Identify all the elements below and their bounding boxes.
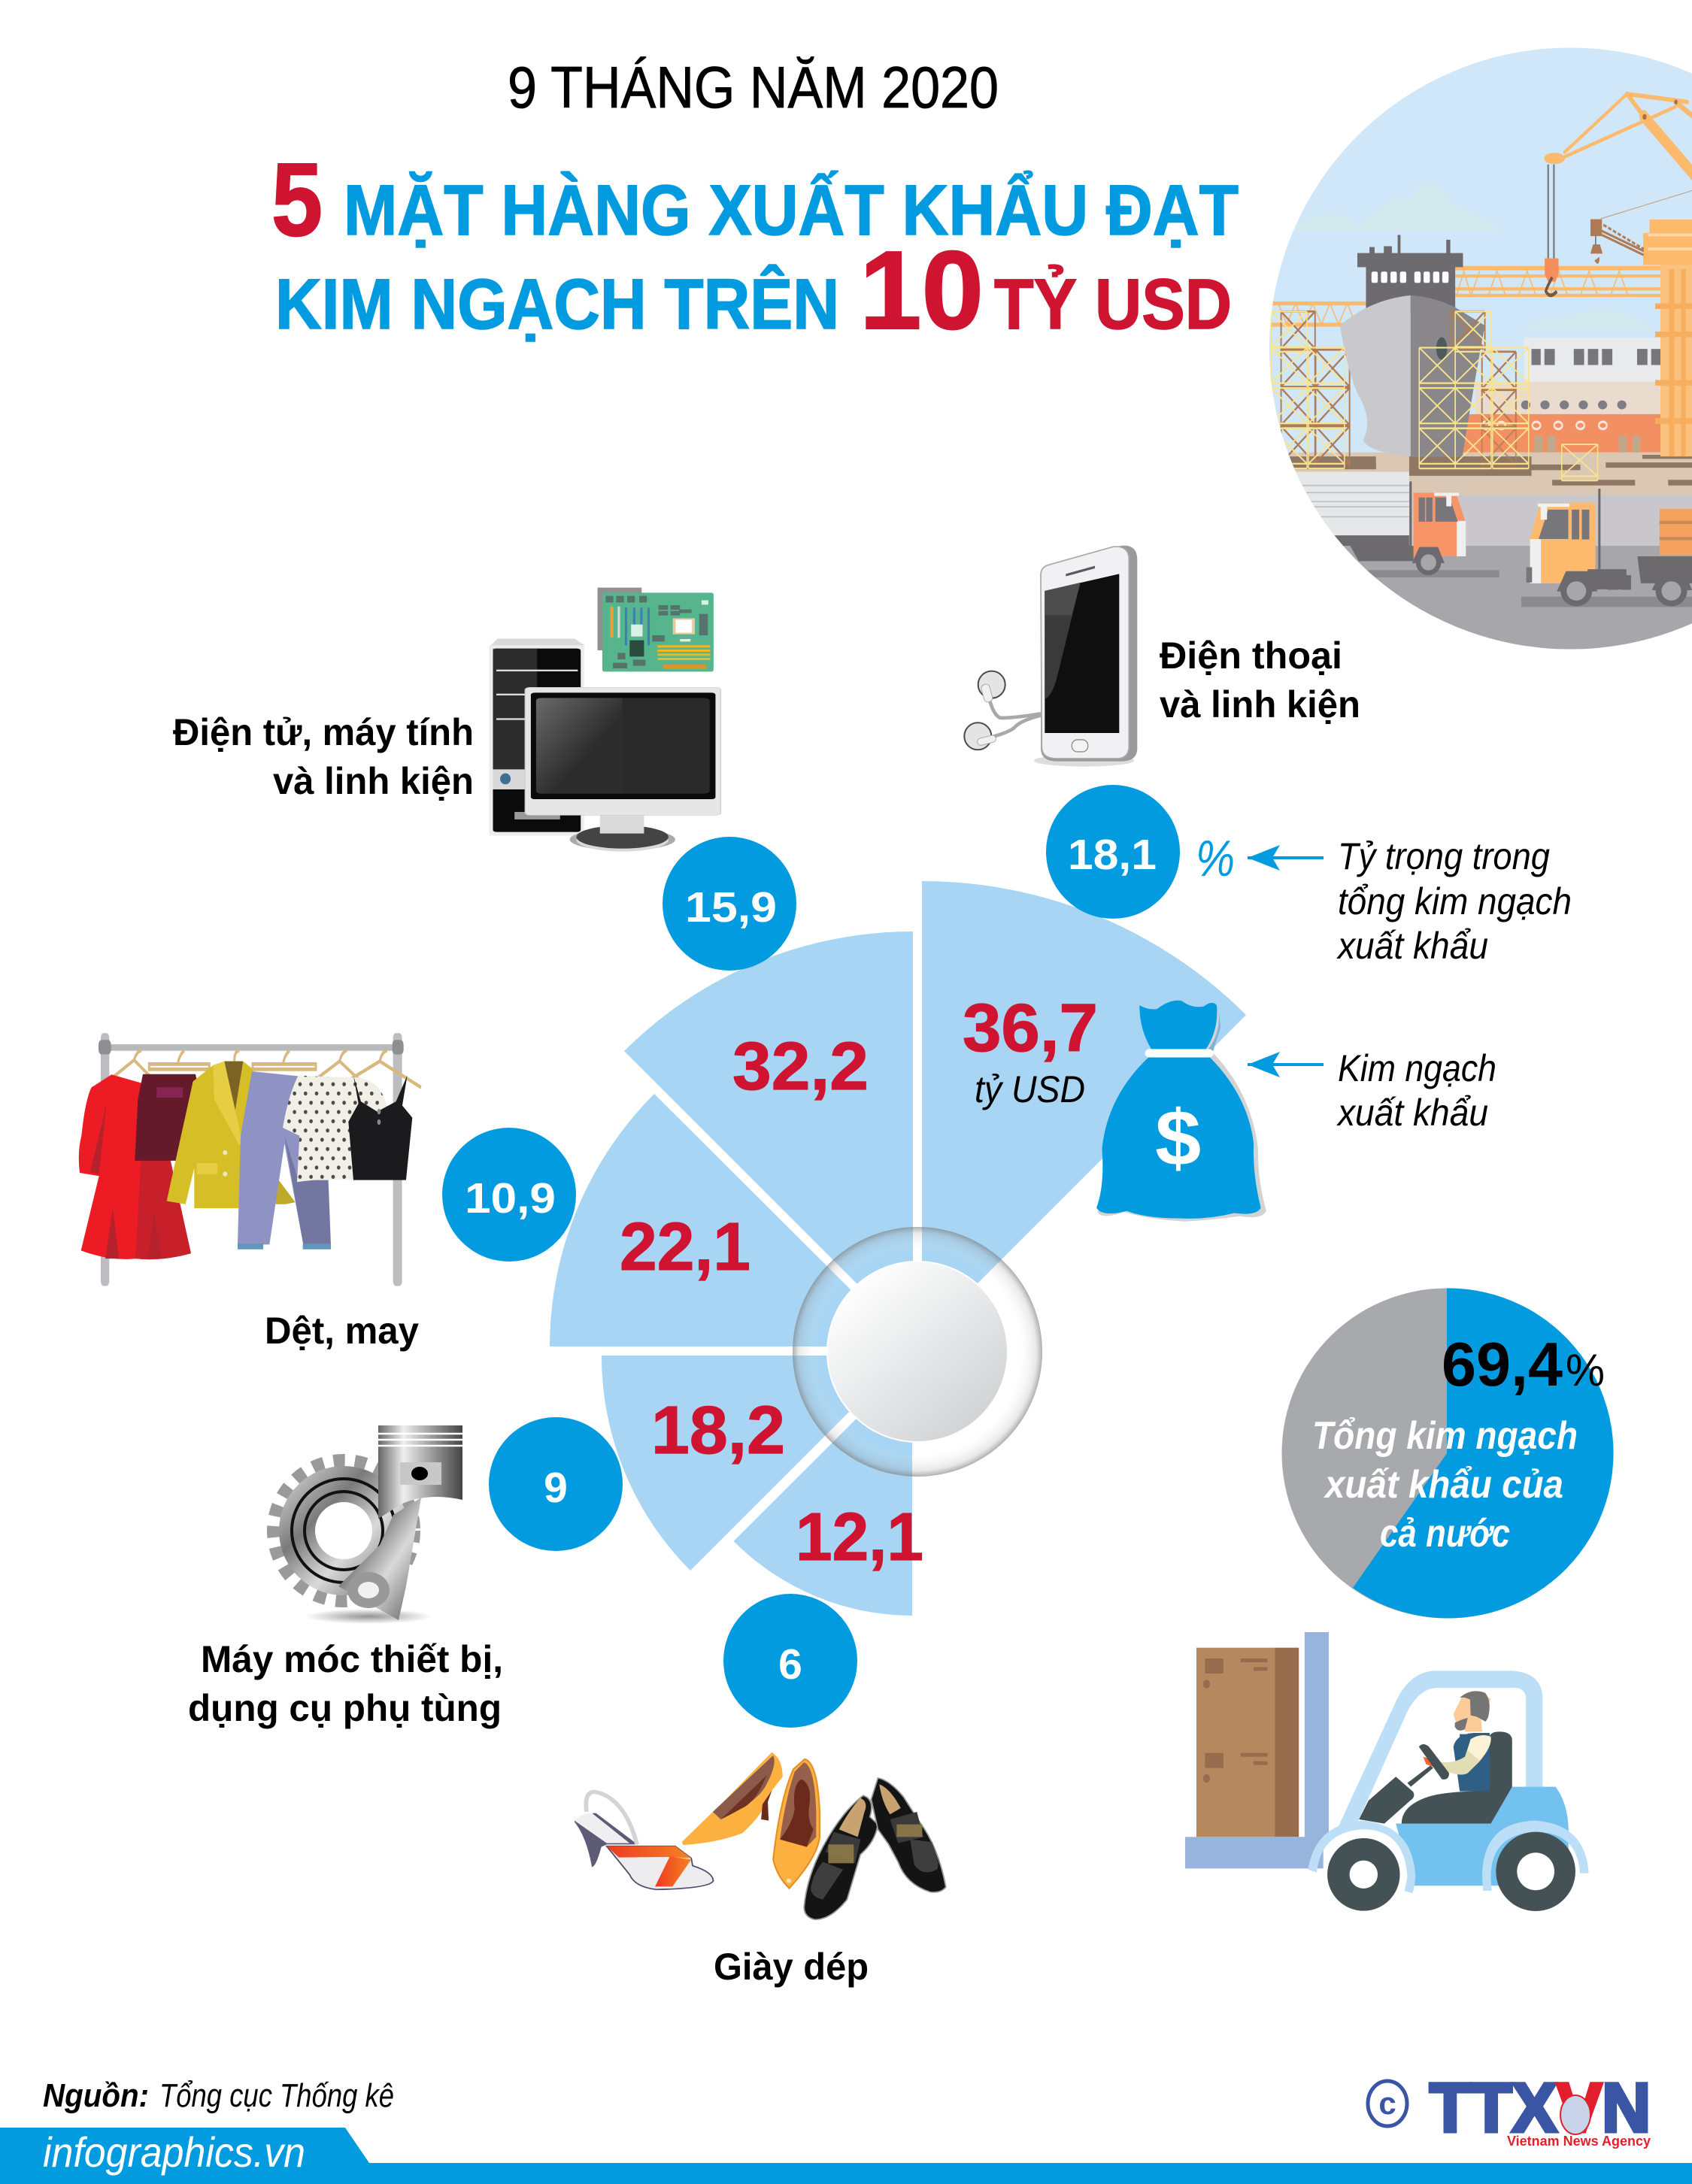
illustration: shipyard port in circle: [1266, 38, 1692, 662]
label: machinery: dụng cụ phụ tùng: [188, 1687, 502, 1729]
title: main heading: [271, 142, 1239, 353]
arrow: share: [1248, 845, 1324, 871]
label: electronics: [173, 711, 474, 802]
pie value: %: [1566, 1345, 1605, 1395]
bubble: 9: 9: [544, 1464, 568, 1512]
logo: copyright TTXVN: TTXVN: [1430, 2070, 1651, 2146]
value: 18,2: 18,2: [651, 1393, 785, 1468]
title: main heading: TỶ USD: [994, 265, 1232, 344]
icon: money bag: [1096, 1001, 1266, 1222]
note: share of exports: Tỷ trọng trong: [1338, 835, 1550, 877]
value: 22,1: 22,1: [620, 1210, 750, 1285]
sector: phones 36,7: [922, 881, 1246, 1339]
label: electronics: Điện tử, máy tính: [173, 711, 474, 753]
bubble: 15,9: 15,9: [685, 883, 777, 931]
label: machinery: Máy móc thiết bị,: [201, 1638, 503, 1680]
title: main heading: MẶT HÀNG XUẤT KHẨU ĐẠT: [344, 170, 1239, 250]
label: machinery: [188, 1638, 503, 1729]
label: phones: [1160, 635, 1360, 725]
label: footwear: Giày dép: [714, 1946, 869, 1988]
bubble: 18,1: 18,1: [1068, 831, 1157, 879]
chart: radial sector chart: [550, 881, 1246, 1616]
logo: copyright TTXVN: Vietnam News Agency: [1507, 2134, 1651, 2149]
note: share of exports: [1336, 835, 1572, 967]
icon: clothes rack: [79, 1033, 421, 1286]
bubble: 10,9: [442, 1128, 576, 1262]
hub ring: [793, 1227, 1042, 1477]
bubble: 10,9: 10,9: [465, 1174, 556, 1222]
pie value: 69,4: [1442, 1329, 1563, 1399]
website: infographics.vn: [43, 2128, 305, 2176]
note: share of exports: tổng kim ngạch: [1338, 880, 1572, 922]
label: electronics: và linh kiện: [273, 760, 474, 802]
source line: [43, 2077, 394, 2114]
note: export value: [1336, 1047, 1496, 1134]
sector: machinery 18,2: [602, 1356, 905, 1571]
icon: phone with earphones: [964, 546, 1137, 767]
logo: copyright TTXVN: c: [1378, 2086, 1396, 2121]
icon: shoes: [575, 1752, 946, 1919]
label: phones: và linh kiện: [1160, 683, 1360, 725]
pie caption: cả nước: [1380, 1512, 1510, 1555]
value: 32,2: 32,2: [732, 1029, 869, 1104]
value: 36,7 tỷ USD: [963, 991, 1098, 1110]
value: 12,1: 12,1: [796, 1500, 923, 1575]
value: 36,7 tỷ USD: tỷ USD: [975, 1068, 1085, 1110]
title: period: 9 THÁNG NĂM 2020: [508, 54, 999, 120]
icon: forklift: [1185, 1632, 1589, 1911]
hub centre: [827, 1262, 1008, 1442]
label: phones: Điện thoại: [1160, 635, 1342, 677]
value: 36,7 tỷ USD: 36,7: [963, 991, 1098, 1066]
icon: money bag: $: [1155, 1094, 1201, 1182]
bubble: 9: [489, 1417, 623, 1551]
footer band: [0, 2128, 1692, 2184]
percent sign: %: [1196, 830, 1235, 887]
bubble: 6: [723, 1594, 857, 1728]
chart: share of total exports pie: [1281, 1288, 1614, 1618]
bubble: 18,1: [1046, 785, 1180, 919]
pie caption: xuất khẩu của: [1323, 1463, 1563, 1507]
title: main heading: 5: [271, 142, 323, 258]
bubble: 15,9: [663, 837, 796, 971]
pie caption: [1312, 1414, 1578, 1555]
sector: footwear 12,1: [734, 1363, 912, 1616]
pie caption: Tổng kim ngạch: [1312, 1414, 1578, 1458]
note: export value: xuất khẩu: [1336, 1092, 1488, 1134]
icon: computer and motherboard: [489, 588, 720, 852]
title: main heading: KIM NGẠCH TRÊN: [275, 265, 839, 344]
source line: Tổng cục Thống kê: [159, 2077, 394, 2114]
icon: gear and piston: [274, 1425, 462, 1624]
source line: Nguồn:: [43, 2077, 149, 2114]
arrow: export value: [1248, 1052, 1324, 1077]
bubble: 6: 6: [778, 1640, 802, 1689]
note: export value: Kim ngạch: [1338, 1047, 1496, 1089]
note: share of exports: xuất khẩu: [1336, 925, 1488, 967]
sector: electronics 32,2: [624, 931, 913, 1340]
title: main heading: 10: [860, 229, 984, 353]
sector: textile 22,1: [550, 1094, 908, 1346]
label: textile: Dệt, may: [265, 1310, 419, 1352]
